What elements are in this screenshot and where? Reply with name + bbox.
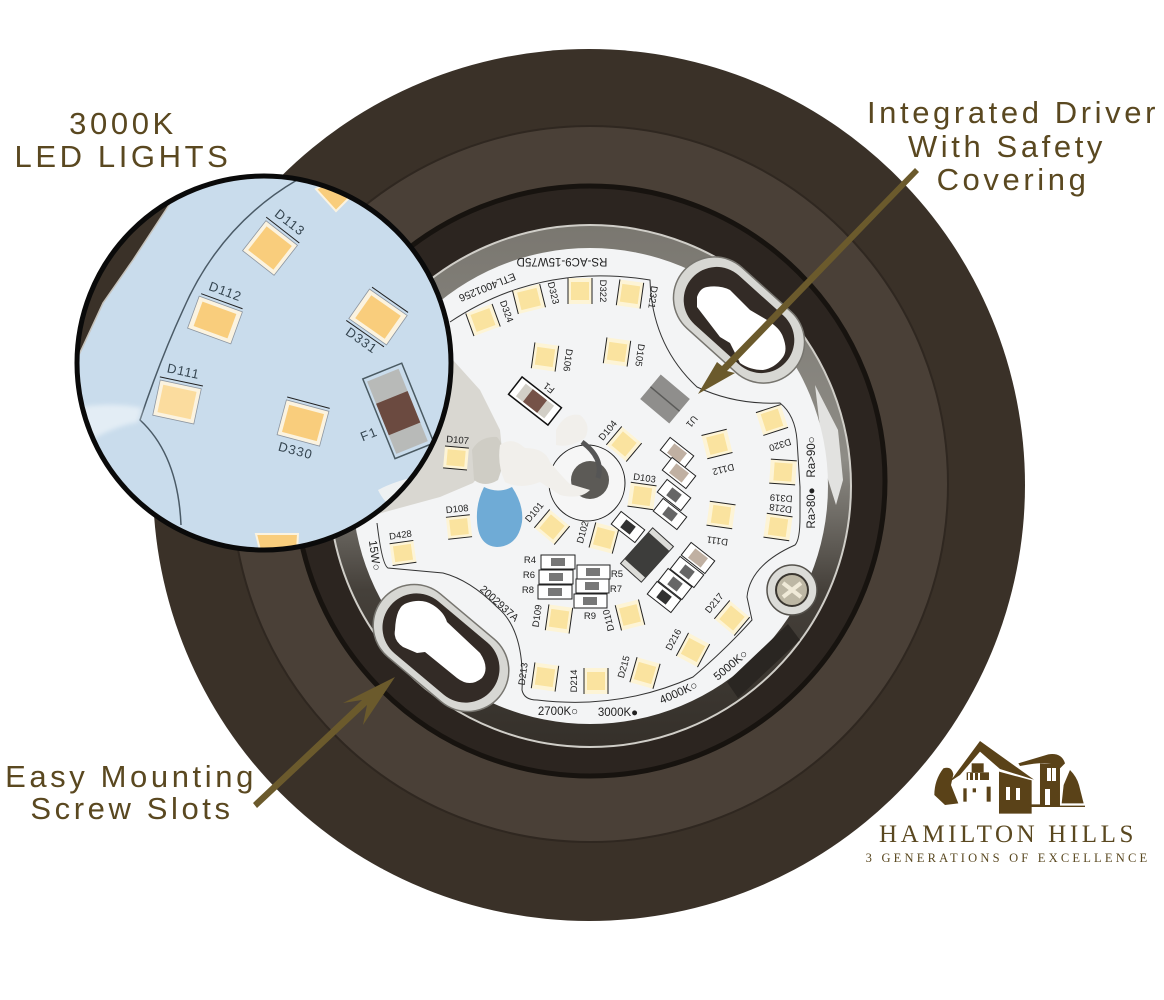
LED D103: D103 [632, 472, 656, 486]
fuse F1 [509, 366, 570, 425]
resistors R5 R7 R9: R7 [610, 584, 622, 595]
grey sealant [472, 437, 503, 484]
LED D319 [768, 459, 797, 504]
top-right mounting slot [657, 240, 821, 400]
lens background [77, 176, 451, 550]
LED D217: D217 [703, 591, 726, 616]
Hamilton Hills logo [866, 741, 1150, 865]
LED D320 [756, 405, 794, 453]
label: easy mounting: Screw Slots [30, 791, 234, 826]
clear cover right streak [815, 385, 843, 505]
screw head [776, 574, 808, 606]
LED D111 [704, 501, 736, 548]
resistors R5 R7 R9: R9 [584, 611, 596, 622]
LED D101 [523, 500, 570, 545]
board labels: 5000K○ [712, 648, 750, 683]
logo: tagline: 3 GENERATIONS OF EXCELLENCE [866, 851, 1150, 865]
components C1 C2 C3 R1 R2 R3 J1 J2 J3 [611, 437, 715, 613]
LED bottom partial zoom [256, 534, 298, 550]
LED D214: D214 [569, 670, 580, 692]
label: easy mounting: Easy Mounting [5, 759, 257, 794]
LED D321 [616, 279, 660, 311]
LED D109 [530, 602, 573, 634]
LED D331 zoom [338, 286, 409, 360]
board labels: RS-AC9-15W75D [517, 255, 607, 267]
bottom-left mounting slot [356, 568, 526, 728]
LED D106: D106 [560, 348, 574, 372]
logo: house windows [968, 768, 1056, 805]
screw boss [767, 565, 817, 615]
LED D104 [596, 418, 642, 462]
LED D106 [531, 342, 575, 374]
driver chip U1 [640, 375, 706, 437]
logo: company name: HAMILTON HILLS [879, 821, 1137, 848]
board trace outline [377, 276, 800, 702]
LED D107 [443, 434, 470, 470]
LED D214 [569, 668, 608, 694]
LED D322: D322 [597, 280, 608, 302]
LED D330 zoom [272, 397, 330, 463]
LED D324 [466, 298, 515, 336]
outer trim ring [153, 49, 1025, 921]
LED D105: D105 [632, 343, 646, 367]
white sealant [499, 441, 590, 497]
board labels: 3000K● [598, 707, 638, 719]
LED D110 [601, 599, 645, 634]
board outline in lens [140, 180, 297, 525]
LED D110: D110 [601, 608, 617, 632]
LED D108: D108 [445, 503, 469, 516]
resistors R4 R6 R8: R6 [523, 570, 535, 581]
LED D112 zoom [188, 276, 250, 344]
lens border [77, 176, 451, 550]
circuit board [352, 248, 828, 724]
LED D428 [388, 529, 416, 566]
inner trim ring [295, 186, 885, 776]
blue capacitor [477, 487, 522, 547]
LED D323 [513, 280, 561, 314]
LED D105 [603, 337, 647, 369]
LED D331 zoom: D331 [343, 324, 380, 357]
LED D330 zoom: D330 [277, 439, 315, 462]
label: integrated driver: With Safety [908, 129, 1106, 164]
dark corner in lens [78, 199, 173, 357]
board labels: 2002937A [477, 583, 521, 624]
callout arrow: mounting slots [253, 677, 395, 808]
resistors R5 R7 R9: R5 [611, 569, 623, 580]
LED D113 zoom [241, 203, 310, 275]
LED D323: D323 [545, 281, 561, 305]
LED D320: D320 [767, 436, 792, 453]
LED D213 [516, 660, 559, 692]
LED D112: D112 [711, 461, 735, 477]
resistors R4 R6 R8: R8 [522, 585, 534, 596]
resistors R4 R6 R8 [522, 555, 575, 599]
middle trim ring [232, 126, 948, 842]
LED D428: D428 [389, 529, 413, 543]
LED D319: D319 [770, 491, 793, 504]
LED D113 zoom: D113 [272, 206, 308, 239]
LED D104: D104 [597, 419, 620, 443]
glue spot in lens [378, 478, 408, 502]
LED D111 zoom: D111 [166, 360, 201, 382]
label: easy mounting [5, 759, 257, 826]
slot surround [657, 240, 821, 400]
driver chip U1: U1 [683, 413, 700, 429]
board labels: 2700K○ [538, 706, 578, 718]
label: integrated driver: Covering [937, 162, 1089, 197]
LED D103 [627, 471, 658, 510]
centre wire hole [549, 442, 625, 521]
LED D218 [763, 500, 794, 541]
LED D108 [445, 503, 472, 539]
LED D216 [663, 626, 710, 667]
white sealant upper [556, 415, 588, 446]
LED D111 zoom [152, 359, 207, 424]
clear cover [329, 225, 851, 747]
LED D112 zoom: D112 [207, 278, 244, 304]
LED D102: D102 [575, 520, 591, 545]
screw cross [783, 583, 801, 597]
fuse F1: F1 [542, 380, 557, 395]
callout arrow: integrated driver [698, 168, 919, 394]
LED top partial zoom [314, 186, 349, 212]
LED D217 [703, 591, 750, 636]
pale reflection [84, 404, 144, 438]
torn backing area [335, 360, 502, 527]
hole outline [549, 445, 625, 521]
wire [582, 442, 599, 478]
wire solder [571, 461, 609, 499]
label: integrated driver [867, 95, 1159, 197]
LED D324: D324 [497, 299, 515, 324]
magnified callout: 3000K LED lights [77, 176, 451, 550]
board labels: 15W○ [366, 540, 382, 572]
LED D215 [615, 653, 660, 689]
LED D216: D216 [664, 627, 684, 653]
slot opening [395, 601, 486, 683]
label: integrated driver: Integrated Driver [867, 95, 1159, 130]
LED D321: D321 [645, 285, 659, 309]
LED D213: D213 [517, 662, 531, 686]
resistors R4 R6 R8: R4 [524, 555, 536, 566]
LED D107: D107 [446, 434, 469, 447]
LED D218: D218 [769, 501, 793, 515]
label: 3000K LED lights [15, 106, 231, 174]
label: 3000K LED lights: LED LIGHTS [15, 139, 231, 174]
board labels: ETL4001256 [457, 270, 517, 304]
board labels: Ra>90○ [806, 436, 818, 478]
label: 3000K LED lights: 3000K [69, 106, 177, 141]
fuse F1 zoom: F1 [358, 424, 380, 444]
fuse F1 zoom [341, 363, 434, 467]
LED D111: D111 [706, 533, 729, 547]
LED D102 [575, 518, 619, 554]
slot surround [356, 568, 526, 728]
LED D109: D109 [531, 604, 545, 628]
LED D112 [701, 429, 737, 477]
LED D322 [568, 278, 608, 304]
board labels [366, 255, 818, 719]
resistors R5 R7 R9 [574, 565, 623, 622]
board labels: Ra>80● [806, 487, 818, 529]
logo: house icon [934, 741, 1085, 814]
LED D101: D101 [523, 500, 546, 525]
dark band lower right [727, 624, 800, 698]
board labels: 4000K○ [658, 680, 700, 707]
black diode [621, 528, 673, 582]
light fixture photo [153, 49, 1025, 921]
screw [767, 565, 817, 615]
slot opening [697, 286, 786, 370]
LED D215: D215 [616, 655, 633, 680]
